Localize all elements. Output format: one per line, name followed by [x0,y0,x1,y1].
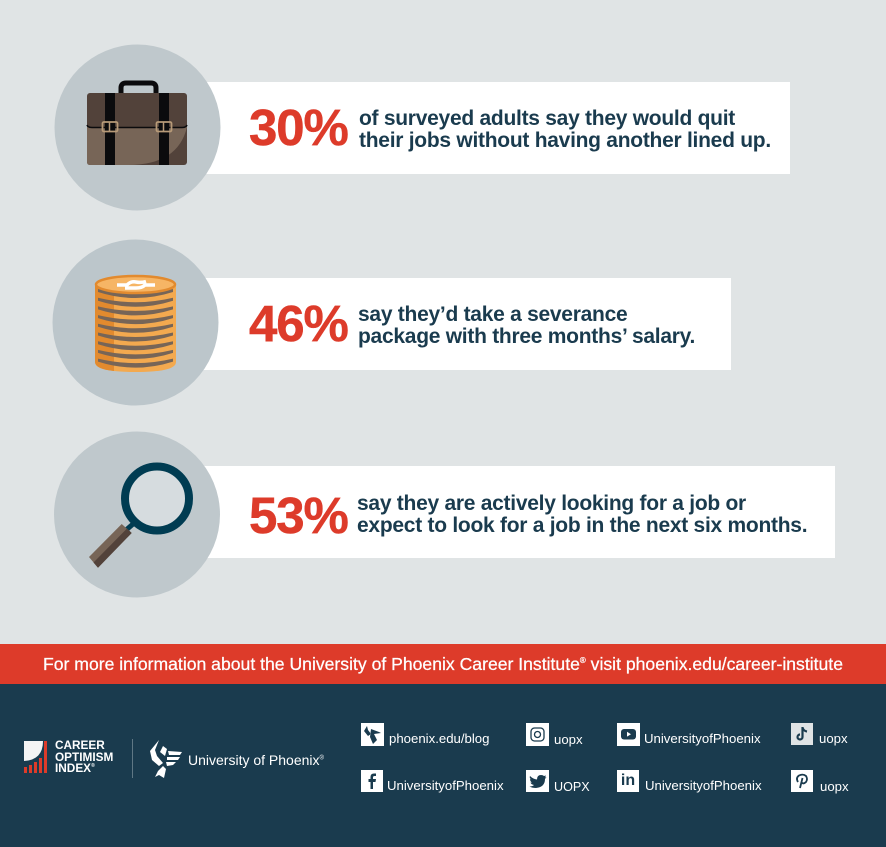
social: youtube [617,723,761,746]
icon: coin stack [52,240,218,406]
footer panel [0,684,886,847]
logo: Career Optimism Index: INDEX® [55,761,95,775]
stat row 1 bar [200,82,790,174]
social: blog [361,723,489,746]
social: tiktok: uopx [819,731,848,746]
social: instagram: uopx [554,732,583,747]
logo: University of Phoenix [132,739,324,778]
red call-to-action banner: For more information about the University of Phoenix Career Institute® visit phoenix.edu/career-institute [43,654,843,674]
icon: twitter [526,770,549,792]
icon: pinterest [791,770,813,792]
social: linkedin: UniversityofPhoenix [645,778,762,793]
icon: magnifying glass [54,432,220,598]
icon: linkedin: in [621,772,635,789]
social: twitter [526,770,590,794]
social: blog: phoenix.edu/blog [389,731,489,746]
stat 3 text: say they are actively looking for a job or [357,492,746,515]
stat 1 text [359,107,771,152]
social: linkedin [617,770,762,793]
social: pinterest [791,770,849,794]
social: instagram [526,723,583,747]
social: twitter: UOPX [554,780,590,794]
icon: briefcase [54,44,220,210]
icon: youtube [617,723,640,746]
stat 3 text: expect to look for a job in the next six months. [357,514,807,537]
icon: phoenix [361,723,384,746]
social: youtube: UniversityofPhoenix [644,731,761,746]
icon: facebook [361,770,383,792]
logo: Career Optimism Index: OPTIMISM [55,750,113,764]
icon: tiktok [791,723,813,745]
red call-to-action banner [0,644,886,684]
stat 2 text: say they’d take a severance [358,303,627,326]
social: facebook [361,770,504,793]
stat row 3 bar [200,466,835,558]
stat 3 text [357,492,807,537]
stat 2 text: package with three months’ salary. [358,325,695,348]
icon: linkedin [617,770,639,792]
social: tiktok [791,723,848,746]
stat 2 percentage: 46% [249,295,348,352]
stat 1 percentage: 30% [249,99,348,156]
stat 3 percentage: 53% [249,487,348,544]
stat 1 text: their jobs without having another lined up. [359,129,771,152]
social: facebook: UniversityofPhoenix [387,778,504,793]
stat 2 text [358,303,695,348]
logo: University of Phoenix: University of Phoenix® [188,752,324,768]
social: pinterest: uopx [820,779,849,794]
icon: instagram [526,723,549,746]
stat 1 text: of surveyed adults say they would quit [359,107,735,130]
stat row 2 bar [200,278,731,370]
logo: Career Optimism Index: CAREER [55,738,105,752]
logo: Career Optimism Index [24,738,113,775]
